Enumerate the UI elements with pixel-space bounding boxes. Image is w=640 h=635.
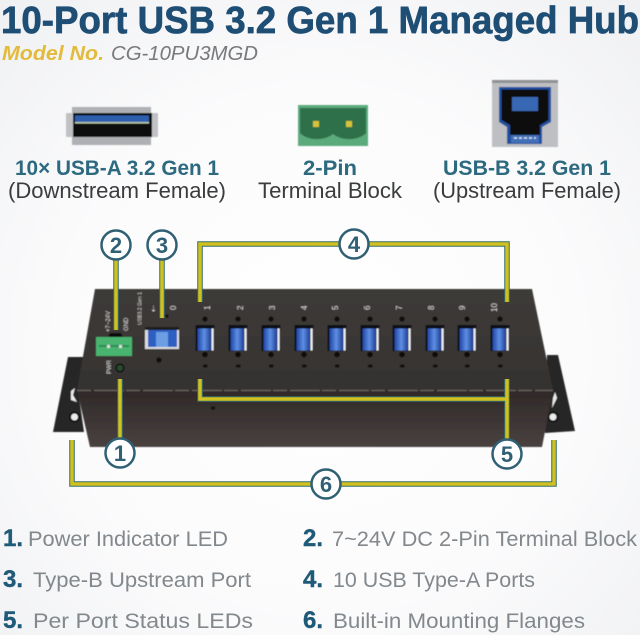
legend item 3: 3. [3,566,23,593]
front screw dot [211,406,215,410]
legend item 5 [3,607,253,634]
label: USB-A: 10× USB-A 3.2 Gen 1 [15,157,219,180]
legend item 1: Power Indicator LED [28,528,228,551]
hub silk-screen labels: ⇠ [149,305,158,312]
callout leader lines [72,244,554,484]
model number [2,43,258,65]
hub silk-screen labels: 5 [331,305,340,310]
USB-B port on hub [145,314,179,363]
terminal block connector [96,333,132,356]
badge numerals: 4 [348,232,361,257]
hub silk-screen labels: USB3.2 Gen 1 [138,292,144,325]
label: USB-B: USB-B 3.2 Gen 1 [443,157,611,180]
hub silk-screen labels: 10 [490,303,499,312]
legend item 6: Built-in Mounting Flanges [333,610,585,633]
hub silk-screen labels: 8 [427,305,436,310]
hub silk-screen labels: GND [124,317,130,331]
model number: CG-10PU3MGD [111,43,258,65]
badge numerals [110,232,513,497]
label: USB-B [433,157,621,203]
legend item 4: 10 USB Type-A Ports [333,569,535,592]
label: USB-A: (Downstream Female) [8,178,226,203]
badge numerals: 1 [114,441,126,466]
legend item 2: 7~24V DC 2-Pin Terminal Block [332,528,638,551]
label: terminal block [258,157,403,203]
badge numerals: 2 [110,233,122,258]
legend item 5: 5. [3,607,23,634]
icon: 2-pin terminal block [298,105,368,146]
hub silk-screen labels: 3 [268,305,277,310]
hub silk-screen labels: 4 [300,305,309,310]
hub silk-screen labels [106,292,499,374]
hub silk-screen labels: PWR [107,359,113,374]
USB-A ports 1 to 10 [196,316,510,368]
right mounting flange [545,355,575,433]
left mounting flange [53,357,84,432]
badge 5 [492,440,522,468]
hub front face [77,390,553,447]
legend item 1: 1. [3,525,23,552]
badge numerals: 6 [320,472,332,497]
legend item 5: Per Port Status LEDs [33,610,253,633]
hub silk-screen labels: 7 [395,305,404,310]
model number: Model No. [2,43,104,65]
hub top face [77,289,553,390]
hub silk-screen labels: +7~24V [106,311,112,332]
hub edge highlight [77,390,553,392]
badge 4 [340,230,368,258]
hub product photo [53,289,575,447]
legend item 3: Type-B Upstream Port [33,569,251,592]
badge 2 [102,230,130,260]
power LED [116,364,124,372]
label: terminal block: Terminal Block [258,178,403,203]
icon: USB-B port [492,80,558,147]
hub silk-screen labels: 6 [363,305,372,310]
hub silk-screen labels: 1 [203,305,212,310]
hub silk-screen labels: 0 [169,305,178,310]
label: terminal block: 2-Pin [303,157,357,180]
badge 3 [148,230,176,260]
badge numerals: 3 [156,233,168,258]
label: USB-B: (Upstream Female) [433,178,621,203]
badge 1 [106,438,134,468]
legend item 4: 4. [303,566,323,593]
hub silk-screen labels: 2 [236,305,245,310]
legend item 6: 6. [303,607,323,634]
legend [3,525,638,634]
leader outlines [72,244,554,484]
badge 6 [312,470,340,498]
icon: USB-A port [66,107,158,145]
legend item 2: 2. [303,525,323,552]
hub silk-screen labels: 9 [458,305,467,310]
numbered callout badges [102,230,522,498]
badge numerals: 5 [501,442,513,467]
leader fill [72,244,554,484]
label: USB-A [8,157,226,203]
